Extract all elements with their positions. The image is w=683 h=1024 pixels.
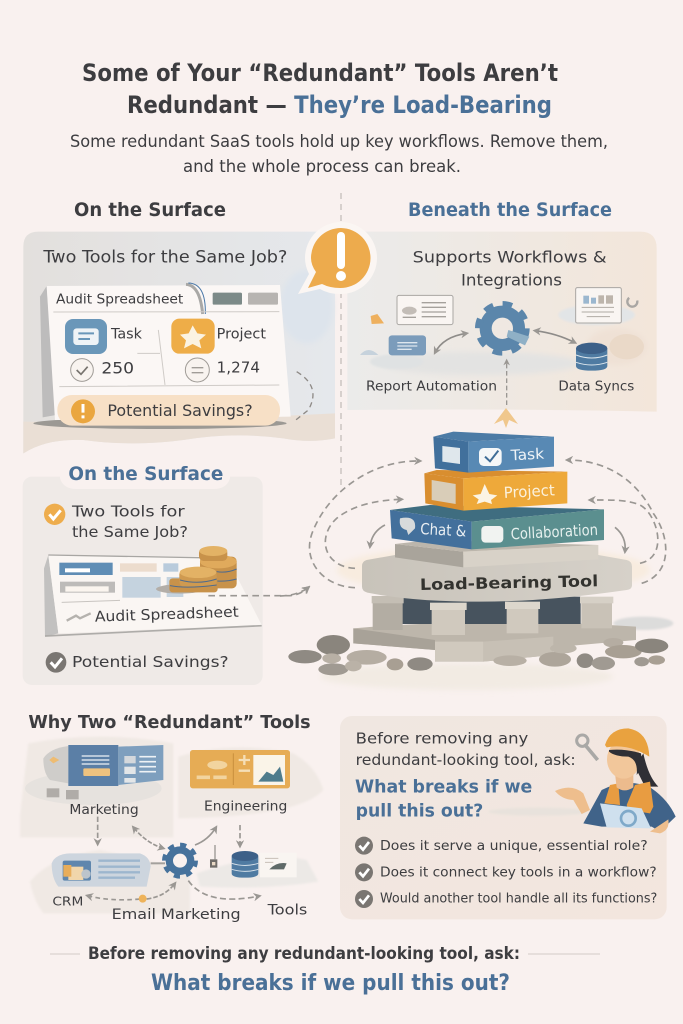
illustration: worker xyxy=(488,728,676,833)
arrow: gear to data xyxy=(535,331,575,343)
label: data syncs: Data Syncs xyxy=(558,379,635,394)
marketing tool xyxy=(20,737,173,837)
panel heading: Two Tools for the Same Job? xyxy=(42,248,287,267)
block: chat and collaboration: Collaboration xyxy=(510,521,598,543)
text: two tools xyxy=(71,502,188,541)
text: potential savings: Potential Savings? xyxy=(72,653,229,671)
icon: chart document xyxy=(558,288,637,325)
heading: on the surface: On the Surface xyxy=(74,199,226,221)
icon: check circle xyxy=(71,359,93,381)
card: audit spreadsheet xyxy=(40,283,291,420)
panel: before removing checklist xyxy=(340,716,676,919)
question: What breaks if we xyxy=(355,778,532,798)
panel heading: Integrations xyxy=(461,270,562,289)
connection arrows xyxy=(87,817,259,900)
arrows: dashed loops around stack xyxy=(280,460,666,596)
subtitle: and the whole process can break. xyxy=(183,157,461,177)
card: audit spreadsheet: Audit Spreadsheet xyxy=(95,604,239,626)
arrow: dashed up xyxy=(505,361,509,405)
block: task: Task xyxy=(509,446,545,464)
footer prompt: Before removing any redundant-looking tool, ask: xyxy=(88,944,520,963)
block: chat and collaboration xyxy=(390,505,604,549)
intro text xyxy=(356,730,576,769)
data tools xyxy=(197,845,318,888)
panel heading: Why Two “Redundant” Tools xyxy=(28,712,311,733)
card: audit spreadsheet: 1,274 xyxy=(217,359,260,377)
card: audit spreadsheet: 250 xyxy=(101,358,134,377)
label: load-bearing tool: Load-Bearing Tool xyxy=(420,571,598,594)
checklist xyxy=(355,837,657,908)
icon: database xyxy=(576,334,644,371)
question xyxy=(355,778,532,822)
slab xyxy=(362,555,632,602)
marketing tool: Marketing xyxy=(69,803,139,818)
arrow: orange up arrow xyxy=(494,408,518,428)
check item 2: Does it connect key tools in a workflow? xyxy=(380,865,657,881)
engineering tool xyxy=(178,747,323,818)
arrow: gear to reports xyxy=(435,333,467,353)
intro text: redundant-looking tool, ask: xyxy=(356,752,576,769)
question: pull this out? xyxy=(356,802,483,822)
title: Redundant — They’re Load-Bearing xyxy=(127,91,552,119)
label: crm: CRM xyxy=(52,895,83,909)
intro text: Before removing any xyxy=(356,730,529,747)
icon: orange check xyxy=(44,504,65,525)
panel: two tools for the same job xyxy=(23,232,335,453)
check item 1: Does it serve a unique, essential role? xyxy=(380,838,648,854)
block: task xyxy=(433,432,554,473)
icon: wrench xyxy=(577,735,598,760)
center dashed divider xyxy=(340,193,342,487)
panel: on the surface lower xyxy=(23,463,308,685)
pillars xyxy=(372,596,613,635)
upper stone xyxy=(395,540,598,567)
icon: central gear xyxy=(479,305,529,352)
check item 3: Would another tool handle all its functions? xyxy=(380,891,657,907)
ground shadow xyxy=(320,545,673,690)
base stone xyxy=(353,622,636,662)
card: audit spreadsheet: Task xyxy=(110,326,143,342)
callout: potential savings: Potential Savings? xyxy=(107,401,253,420)
heading: beneath the surface: Beneath the Surface xyxy=(408,199,612,221)
crm tool xyxy=(30,850,190,913)
label: report automation: Report Automation xyxy=(366,379,497,394)
icon: project xyxy=(171,319,215,354)
icon: stack of coins xyxy=(156,546,237,594)
icon: report document xyxy=(371,295,453,325)
title: Some of Your “Redundant” Tools Aren’t xyxy=(82,59,558,87)
icon: warning speech bubble xyxy=(298,222,377,294)
card: audit spreadsheet xyxy=(44,555,262,637)
arrow: dashed curve xyxy=(295,372,313,421)
illustration: load-bearing stack xyxy=(280,432,673,690)
panel heading: On the Surface xyxy=(68,463,223,485)
callout: potential savings xyxy=(57,395,280,426)
panel heading xyxy=(413,248,607,289)
card: audit spreadsheet: Audit Spreadsheet xyxy=(56,291,184,307)
icon: chat card xyxy=(360,335,426,369)
subtitle xyxy=(70,132,608,177)
text: two tools: the Same Job? xyxy=(72,523,188,541)
label: tools: Tools xyxy=(267,902,307,918)
rocks xyxy=(288,635,668,675)
arrow: dashed to load-bearing tool xyxy=(208,587,308,596)
engineering tool: Engineering xyxy=(204,800,287,815)
panel: beneath the surface xyxy=(347,232,657,412)
subtitle: Some redundant SaaS tools hold up key workflows. Remove them, xyxy=(70,132,608,152)
central gear xyxy=(164,845,196,876)
title xyxy=(82,59,558,119)
panel heading: Supports Workflows & xyxy=(413,248,607,267)
icon: gray check xyxy=(46,652,66,673)
card: audit spreadsheet: Project xyxy=(217,326,267,342)
block: chat and collaboration: Chat & xyxy=(420,520,467,540)
block: project: Project xyxy=(503,481,555,502)
footer question: What breaks if we pull this out? xyxy=(151,971,510,996)
icon: task xyxy=(65,319,107,354)
text: two tools: Two Tools for xyxy=(71,502,185,520)
block: project xyxy=(424,470,567,511)
icon: equals circle xyxy=(185,358,209,382)
dark gap xyxy=(401,597,581,624)
label: email marketing: Email Marketing xyxy=(112,907,241,923)
panel: why two redundant tools xyxy=(20,712,323,923)
